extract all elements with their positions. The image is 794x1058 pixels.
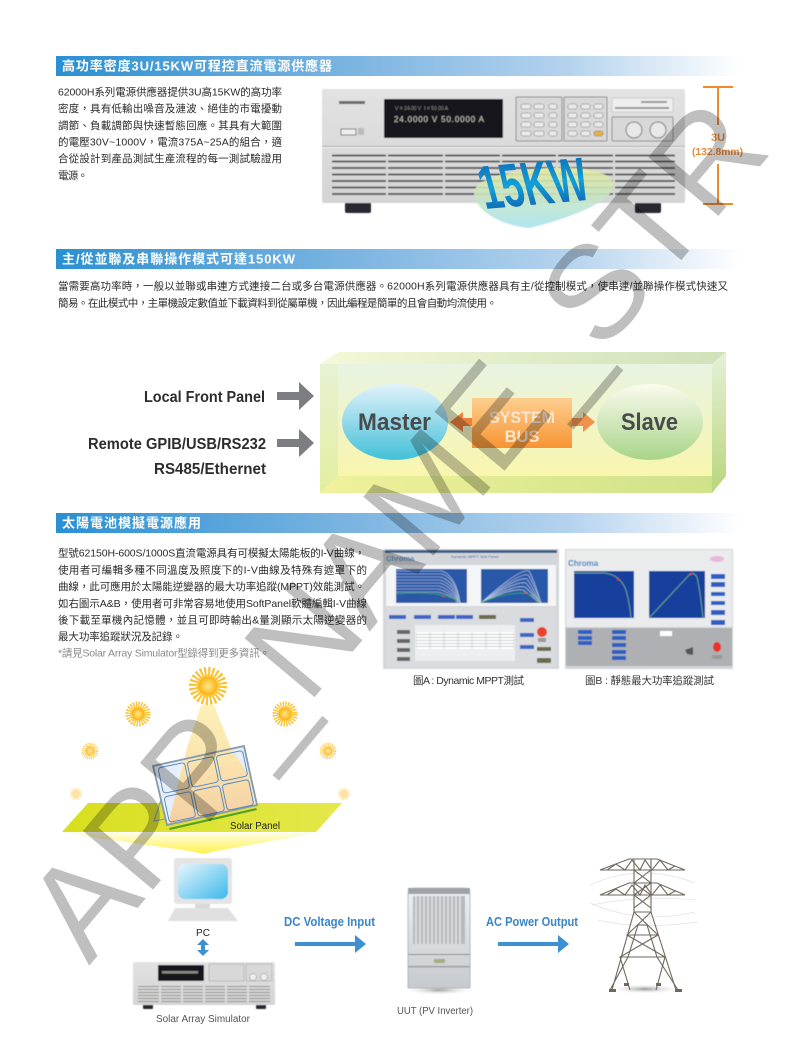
node: system bus — [472, 398, 572, 448]
15KW badge: 15KW — [470, 145, 596, 223]
text block: solar simulation: 如右圖示A&B，使用者可非常容易地使用SoftPanel軟體編輯I-V曲線 — [58, 597, 368, 610]
node: master: Master — [358, 409, 431, 436]
ground plane — [62, 803, 342, 832]
node: slave — [597, 384, 703, 460]
text block: solar simulation: *請見Solar Array Simulator型錄得到更多資訊。 — [58, 646, 270, 660]
sun middle left — [84, 745, 96, 757]
arrow: PC to simulator — [197, 939, 209, 956]
text block: solar simulation: 型號62150H-600S/1000S直流電源具有可模擬太陽能板的I-V曲線， — [58, 546, 365, 560]
section heading: parallel and series: 主/從並聯及串聯操作模式可達150KW — [62, 252, 296, 266]
device photo: 15KW power supply: V = 24.00 V I = 50.00 A — [395, 106, 449, 112]
device: solar array simulator — [133, 962, 275, 1009]
arrow: bus to slave — [569, 412, 595, 432]
sun upper right — [276, 705, 294, 723]
text block: intro: 電源。 — [58, 169, 88, 182]
node: slave: Slave — [621, 409, 678, 436]
caption A: 圖A : Dynamic MPPT測試 — [413, 674, 524, 687]
sun lower left — [72, 790, 80, 798]
arrow: local input — [277, 382, 314, 410]
screenshot A: dynamic MPPT — [383, 549, 559, 669]
label: PC: PC — [196, 928, 210, 939]
label: remote interfaces: Remote GPIB/USB/RS232 — [88, 436, 266, 453]
label: solar panel: Solar Panel — [230, 821, 280, 832]
node: master — [342, 384, 448, 460]
sun upper left — [129, 705, 147, 723]
dimension marker: 3U height: 3U — [711, 132, 725, 144]
label: AC power output: AC Power Output — [486, 915, 579, 929]
sun middle right — [322, 745, 334, 757]
label: local front panel: Local Front Panel — [144, 389, 265, 406]
text block: solar simulation: 使用者可編輯多種不同溫度及照度下的I-V曲線及特殊有遮罩下的 — [58, 564, 367, 576]
text block: intro: 調節、負載調節與快速暫態回應。其具有大範圍 — [58, 119, 282, 132]
sun lower right — [340, 790, 348, 798]
lower light beam — [62, 833, 316, 854]
text block: parallel and series: 當需要高功率時，一般以並聯或串連方式連接二台或多台電源供應器。62000H系列電源供應器具有主/從控制模式，使串連/並聯操作模式快速又 — [58, 280, 728, 292]
icon: transmission tower — [590, 859, 698, 994]
text block: solar simulation: 曲線，此可應用於太陽能逆變器的最大功率追蹤(MPPT)效能測試。 — [58, 580, 365, 593]
arrow: AC — [498, 935, 569, 953]
device: PV inverter — [403, 888, 475, 995]
text block: intro: 合從設計到產品測試生產流程的每一測試驗證用 — [58, 152, 282, 165]
text block: intro: 密度，具有低輸出噪音及漣波、絕佳的市電擾動 — [58, 102, 282, 115]
section heading: solar simulation — [56, 513, 740, 533]
text block: intro: 62000H系列電源供應器提供3U高15KW的高功率 — [58, 86, 282, 98]
node: system bus: SYSTEM — [489, 409, 555, 427]
label: UUT: UUT (PV Inverter) — [397, 1006, 473, 1017]
label: solar array simulator: Solar Array Simulator — [156, 1014, 251, 1025]
arrow: remote input — [277, 429, 314, 457]
dimension marker: 3U height: (132.8mm) — [692, 147, 743, 158]
15KW badge — [470, 145, 614, 228]
text block: intro — [58, 86, 282, 182]
text block: solar simulation — [58, 546, 368, 660]
diagram: master slave system bus — [88, 352, 726, 493]
text block: parallel and series: 簡易。在此模式中，主單機設定數值並下載資料到從屬單機，因此編程是簡單的且會自動均流使用。 — [58, 296, 497, 310]
main sun — [194, 672, 222, 700]
section heading: solar simulation: 太陽電池模擬電源應用 — [62, 516, 201, 530]
screenshot A: dynamic MPPT: Dynamic MPPT Test Panel — [451, 554, 499, 559]
text block: solar simulation: 最大功率追蹤狀況及記錄。 — [58, 630, 183, 643]
device photo: 15KW power supply: 24.0000 V 50.0000 A — [394, 115, 485, 124]
screenshot B: static MPPT — [565, 549, 733, 669]
node: system bus: BUS — [505, 428, 539, 446]
device photo: 15KW power supply — [322, 89, 685, 213]
text block: intro: 的電壓30V~1000V，電流375A~25A的組合，適 — [58, 136, 282, 148]
screenshot A: dynamic MPPT: Chroma — [386, 554, 415, 563]
watermark: APP_NAME_STR — [0, 74, 794, 985]
section heading: high power density: 高功率密度3U/15KW可程控直流電源供應器 — [62, 58, 332, 74]
text block: solar simulation: 後下載至單機內記憶體，並且可即時輸出&量測顯示太陽逆變器的 — [58, 614, 367, 626]
label: RS485 Ethernet: RS485/Ethernet — [154, 461, 266, 478]
icon: PC — [168, 858, 238, 921]
section heading: parallel and series — [56, 249, 740, 269]
text block: parallel and series — [58, 280, 728, 310]
solar panel — [153, 705, 257, 830]
solar scene — [62, 672, 348, 854]
arrow: DC — [295, 935, 366, 953]
label: DC voltage input: DC Voltage Input — [284, 915, 376, 929]
arrow: bus to master — [450, 412, 472, 432]
screenshot B: static MPPT: Chroma — [568, 559, 599, 568]
dimension marker: 3U height — [692, 87, 743, 204]
3D box — [320, 352, 726, 493]
section heading: high power density — [56, 56, 740, 76]
caption B: 圖B : 靜態最大功率追蹤測試 — [585, 674, 714, 687]
